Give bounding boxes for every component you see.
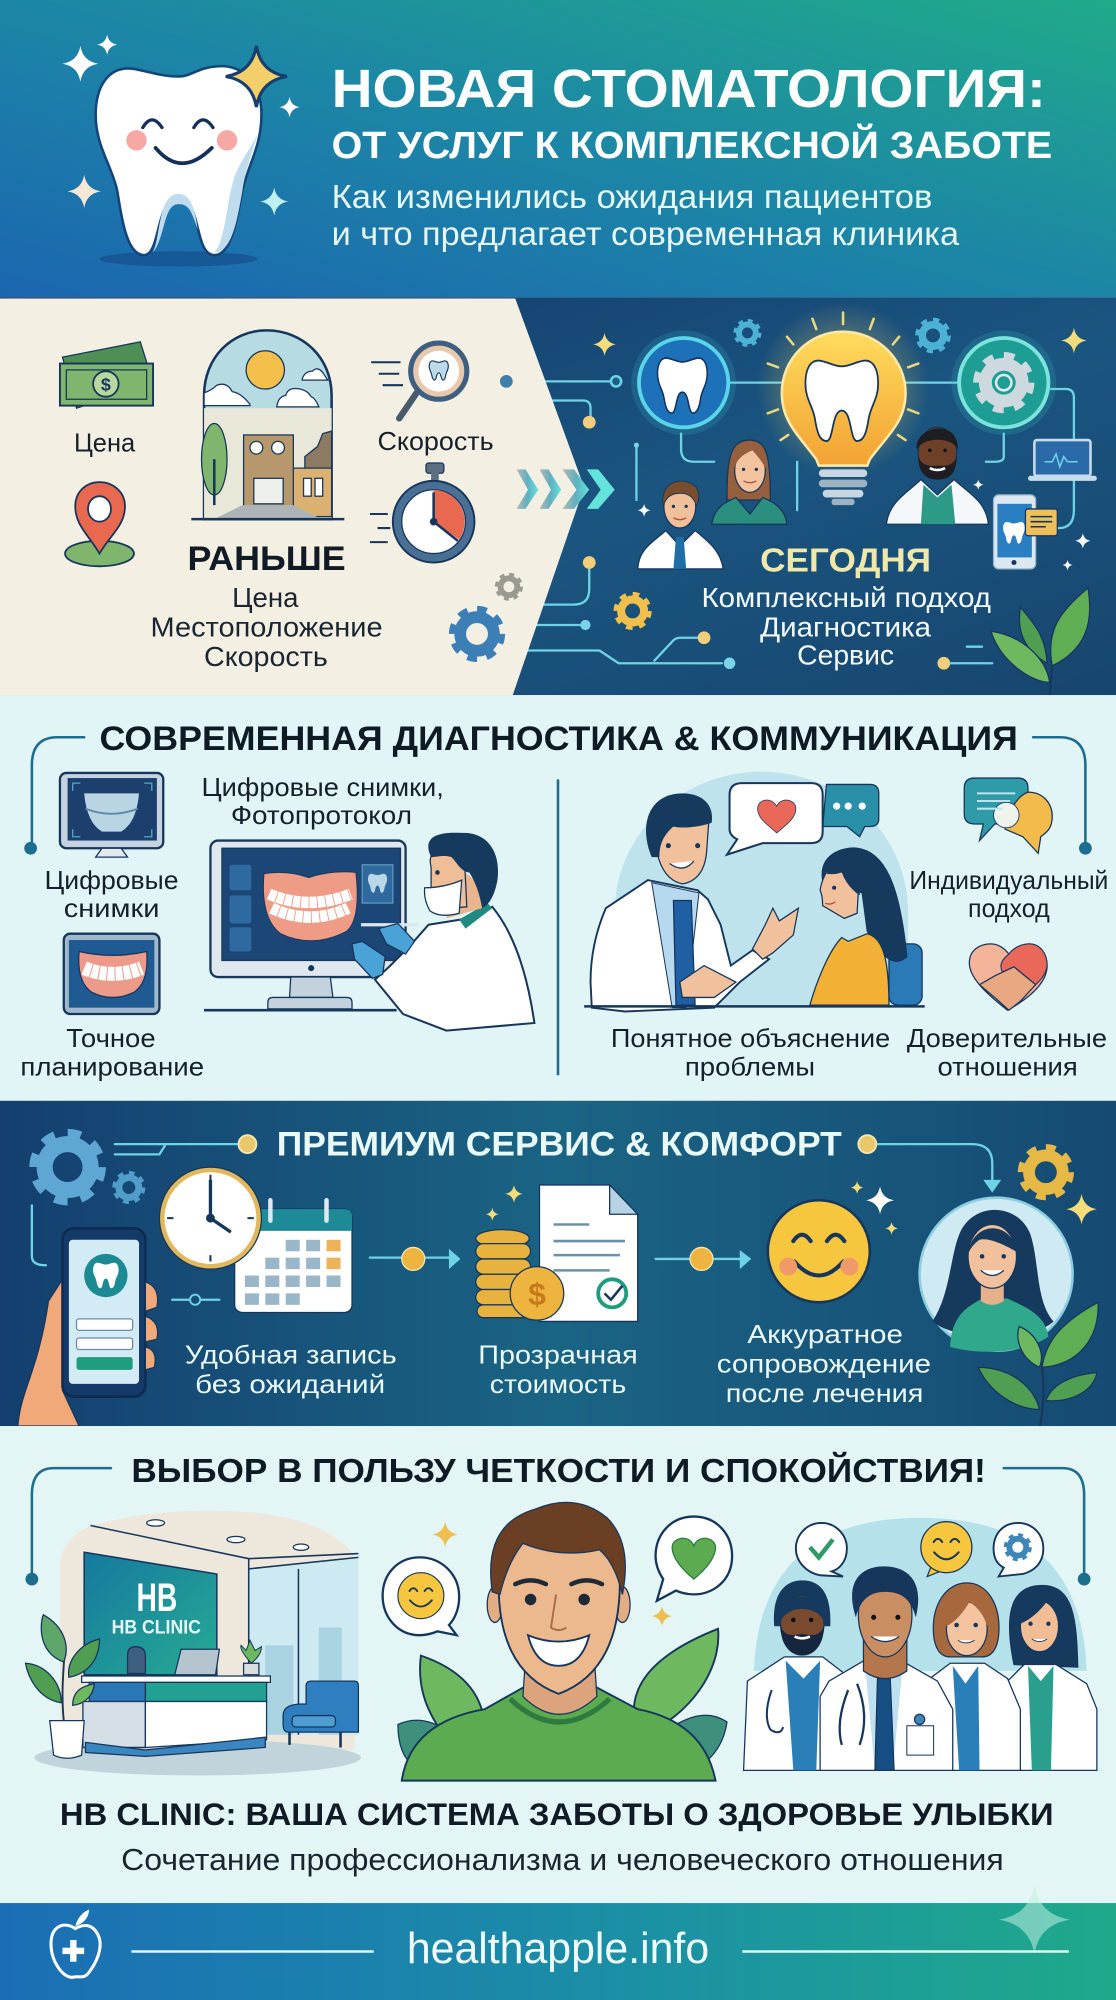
subtitle: ОТ УСЛУГ К КОМПЛЕКСНОЙ ЗАБОТЕ [332, 122, 1052, 167]
panel: today (dark side) [0, 297, 1116, 695]
illustration: smiling man [398, 1502, 727, 1781]
label: speed: Скорость [378, 426, 494, 456]
label: digital images: снимки [64, 893, 159, 923]
chevron arrows right part [587, 469, 615, 509]
decorative star [999, 1885, 1070, 1954]
heading: СОВРЕМЕННАЯ ДИАГНОСТИКА & КОММУНИКАЦИЯ [99, 720, 1018, 758]
label: aftercare: после лечения [726, 1378, 923, 1408]
sub-tagline: Сочетание профессионализма и человеческого отношения [121, 1843, 1004, 1877]
arrow 1 [370, 1247, 460, 1270]
icon: leaves [991, 588, 1090, 695]
caption: images and photo protocol [202, 772, 444, 830]
label: aftercare: сопровождение [717, 1348, 931, 1378]
label: accurate planning: Точное [66, 1023, 156, 1053]
icon: magnifier with tooth [371, 343, 467, 418]
icon: light bulb with tooth [756, 302, 930, 505]
intro text [332, 179, 960, 253]
icon: tooth circle [631, 330, 736, 435]
connector dot [500, 375, 513, 388]
list: earlier: Местоположение [151, 611, 383, 642]
divider [557, 779, 559, 1075]
bracket connectors [26, 1468, 1090, 1585]
connectors [32, 1135, 1001, 1265]
circuit nodes [580, 416, 950, 670]
illustration: male doctor [638, 481, 723, 569]
label: accurate planning: планирование [20, 1051, 204, 1081]
illustration: large monitor with gums [204, 841, 406, 1010]
circuit lines [506, 381, 1074, 663]
icon: speech bubble heart [656, 1517, 732, 1601]
label: accurate planning [20, 1023, 204, 1081]
label: clear explanation: проблемы [685, 1051, 815, 1081]
title: НОВАЯ СТОМАТОЛОГИЯ: [332, 60, 1046, 119]
icon: monitor with x-ray [60, 773, 163, 857]
label: booking [185, 1340, 397, 1399]
label: trusting relations [907, 1023, 1107, 1081]
heading: earlier: РАНЬШЕ [187, 540, 346, 578]
panel: premium service and comfort [0, 1101, 1116, 1429]
icons: gold sparkles [432, 1522, 672, 1626]
illustration: woman colleague [712, 440, 787, 524]
icon: clock and calendar [159, 1167, 352, 1312]
list: earlier: Цена [232, 582, 299, 613]
icon: coins and invoice: $ [528, 1276, 546, 1312]
illustration: clinic reception: HB CLINIC [112, 1617, 201, 1638]
icon: apple with cross [51, 1909, 100, 1977]
panel: earlier (beige side) [0, 298, 589, 695]
label: booking: без ожиданий [195, 1369, 385, 1399]
icon: money: $ [101, 374, 111, 394]
icon: money [60, 342, 153, 408]
arrow 2 [656, 1247, 751, 1270]
label: digital images [45, 865, 179, 923]
person 4 [1004, 1585, 1097, 1770]
label: clear explanation: Понятное объяснение [611, 1023, 890, 1053]
label: transparent cost: стоимость [490, 1369, 626, 1399]
icons: small gears [735, 320, 948, 351]
panel: footer [0, 1885, 1116, 2000]
icons: sparkles [486, 1181, 1097, 1235]
illustration: team of doctors [744, 1518, 1097, 1770]
panel: diagnostics and communication [0, 695, 1116, 1101]
icon: location pin [65, 482, 134, 566]
icon: chat [964, 778, 1052, 853]
connector: small ring [172, 1295, 219, 1305]
icon: smiling tooth mascot [96, 66, 261, 267]
label: transparent cost [478, 1340, 638, 1399]
bracket connectors [24, 737, 1092, 855]
person 1 [744, 1580, 844, 1770]
caption: images and photo protocol: Фотопротокол [231, 800, 412, 830]
icon: speech bubbles [727, 783, 879, 855]
connector [950, 647, 992, 663]
label: individual approach: Индивидуальный [909, 865, 1108, 895]
list: today: Диагностика [760, 611, 931, 642]
icon: coins and invoice [476, 1185, 638, 1321]
illustration: clinic reception [26, 1511, 361, 1776]
list: today [701, 582, 991, 671]
icon: gold star [226, 46, 287, 107]
icon: gear circle [951, 330, 1056, 435]
icons: gears [35, 1135, 1070, 1202]
icons: team speech bubbles [796, 1522, 1043, 1577]
illustration: bearded doctor [886, 427, 988, 524]
label: transparent cost: Прозрачная [478, 1340, 638, 1370]
label: booking: Удобная запись [185, 1340, 397, 1370]
chevron arrows over divider [517, 469, 589, 509]
icon: phone in hand [18, 1228, 158, 1426]
list: earlier [151, 582, 383, 672]
icons: stars [593, 328, 1090, 570]
icon: speech bubble smile [383, 1557, 459, 1635]
icon: smiley [768, 1200, 870, 1302]
icon: laptop [1028, 440, 1097, 481]
label: individual approach: подход [968, 893, 1050, 923]
icon: sparkles [62, 34, 300, 216]
list: today: Комплексный подход [701, 582, 991, 613]
label: price: Цена [74, 428, 136, 458]
heading: ВЫБОР В ПОЛЬЗУ ЧЕТКОСТИ И СПОКОЙСТВИЯ! [131, 1451, 986, 1490]
panel: choice for clarity [0, 1426, 1116, 1904]
label: clear explanation [611, 1023, 890, 1081]
tagline: HB CLINIC: ВАША СИСТЕМА ЗАБОТЫ О ЗДОРОВЬЕ УЛЫБКИ [60, 1796, 1054, 1832]
label: trusting relations: отношения [937, 1051, 1078, 1081]
person 3 [930, 1583, 1020, 1770]
heading: ПРЕМИУМ СЕРВИС & КОМФОРТ [277, 1126, 842, 1164]
label: aftercare [717, 1319, 931, 1408]
label: digital images: Цифровые [45, 865, 179, 895]
icon: gold gear [616, 595, 649, 627]
label: trusting relations: Доверительные [907, 1023, 1107, 1053]
illustration: dentist [352, 833, 534, 1031]
illustration: doctor talks with patient [584, 772, 925, 1011]
panel: header band [0, 0, 1116, 297]
footer lines [131, 1951, 1069, 1953]
illustration: old clinic building [191, 330, 344, 519]
icon: plant [978, 1302, 1098, 1429]
icon: stopwatch [370, 463, 474, 562]
icon: gears [453, 575, 521, 658]
list: earlier: Скорость [204, 641, 328, 672]
intro text: и что предлагает современная клиника [332, 216, 960, 253]
list: today: Сервис [797, 640, 894, 671]
intro text: Как изменились ожидания пациентов [332, 179, 932, 216]
icon: handshake heart [969, 944, 1047, 1010]
caption: images and photo protocol: Цифровые снимки, [202, 772, 444, 802]
icon: phone with chat [994, 495, 1057, 569]
illustration: clinic reception: HB [136, 1576, 177, 1620]
person 2 [820, 1566, 953, 1770]
heading: today: СЕГОДНЯ [760, 542, 931, 579]
label: aftercare: Аккуратное [747, 1319, 903, 1349]
label: individual approach [909, 865, 1108, 923]
illustration: happy patient [920, 1198, 1073, 1352]
website: healthapple.info [407, 1925, 709, 1973]
icon: tablet with teeth [64, 934, 159, 1014]
